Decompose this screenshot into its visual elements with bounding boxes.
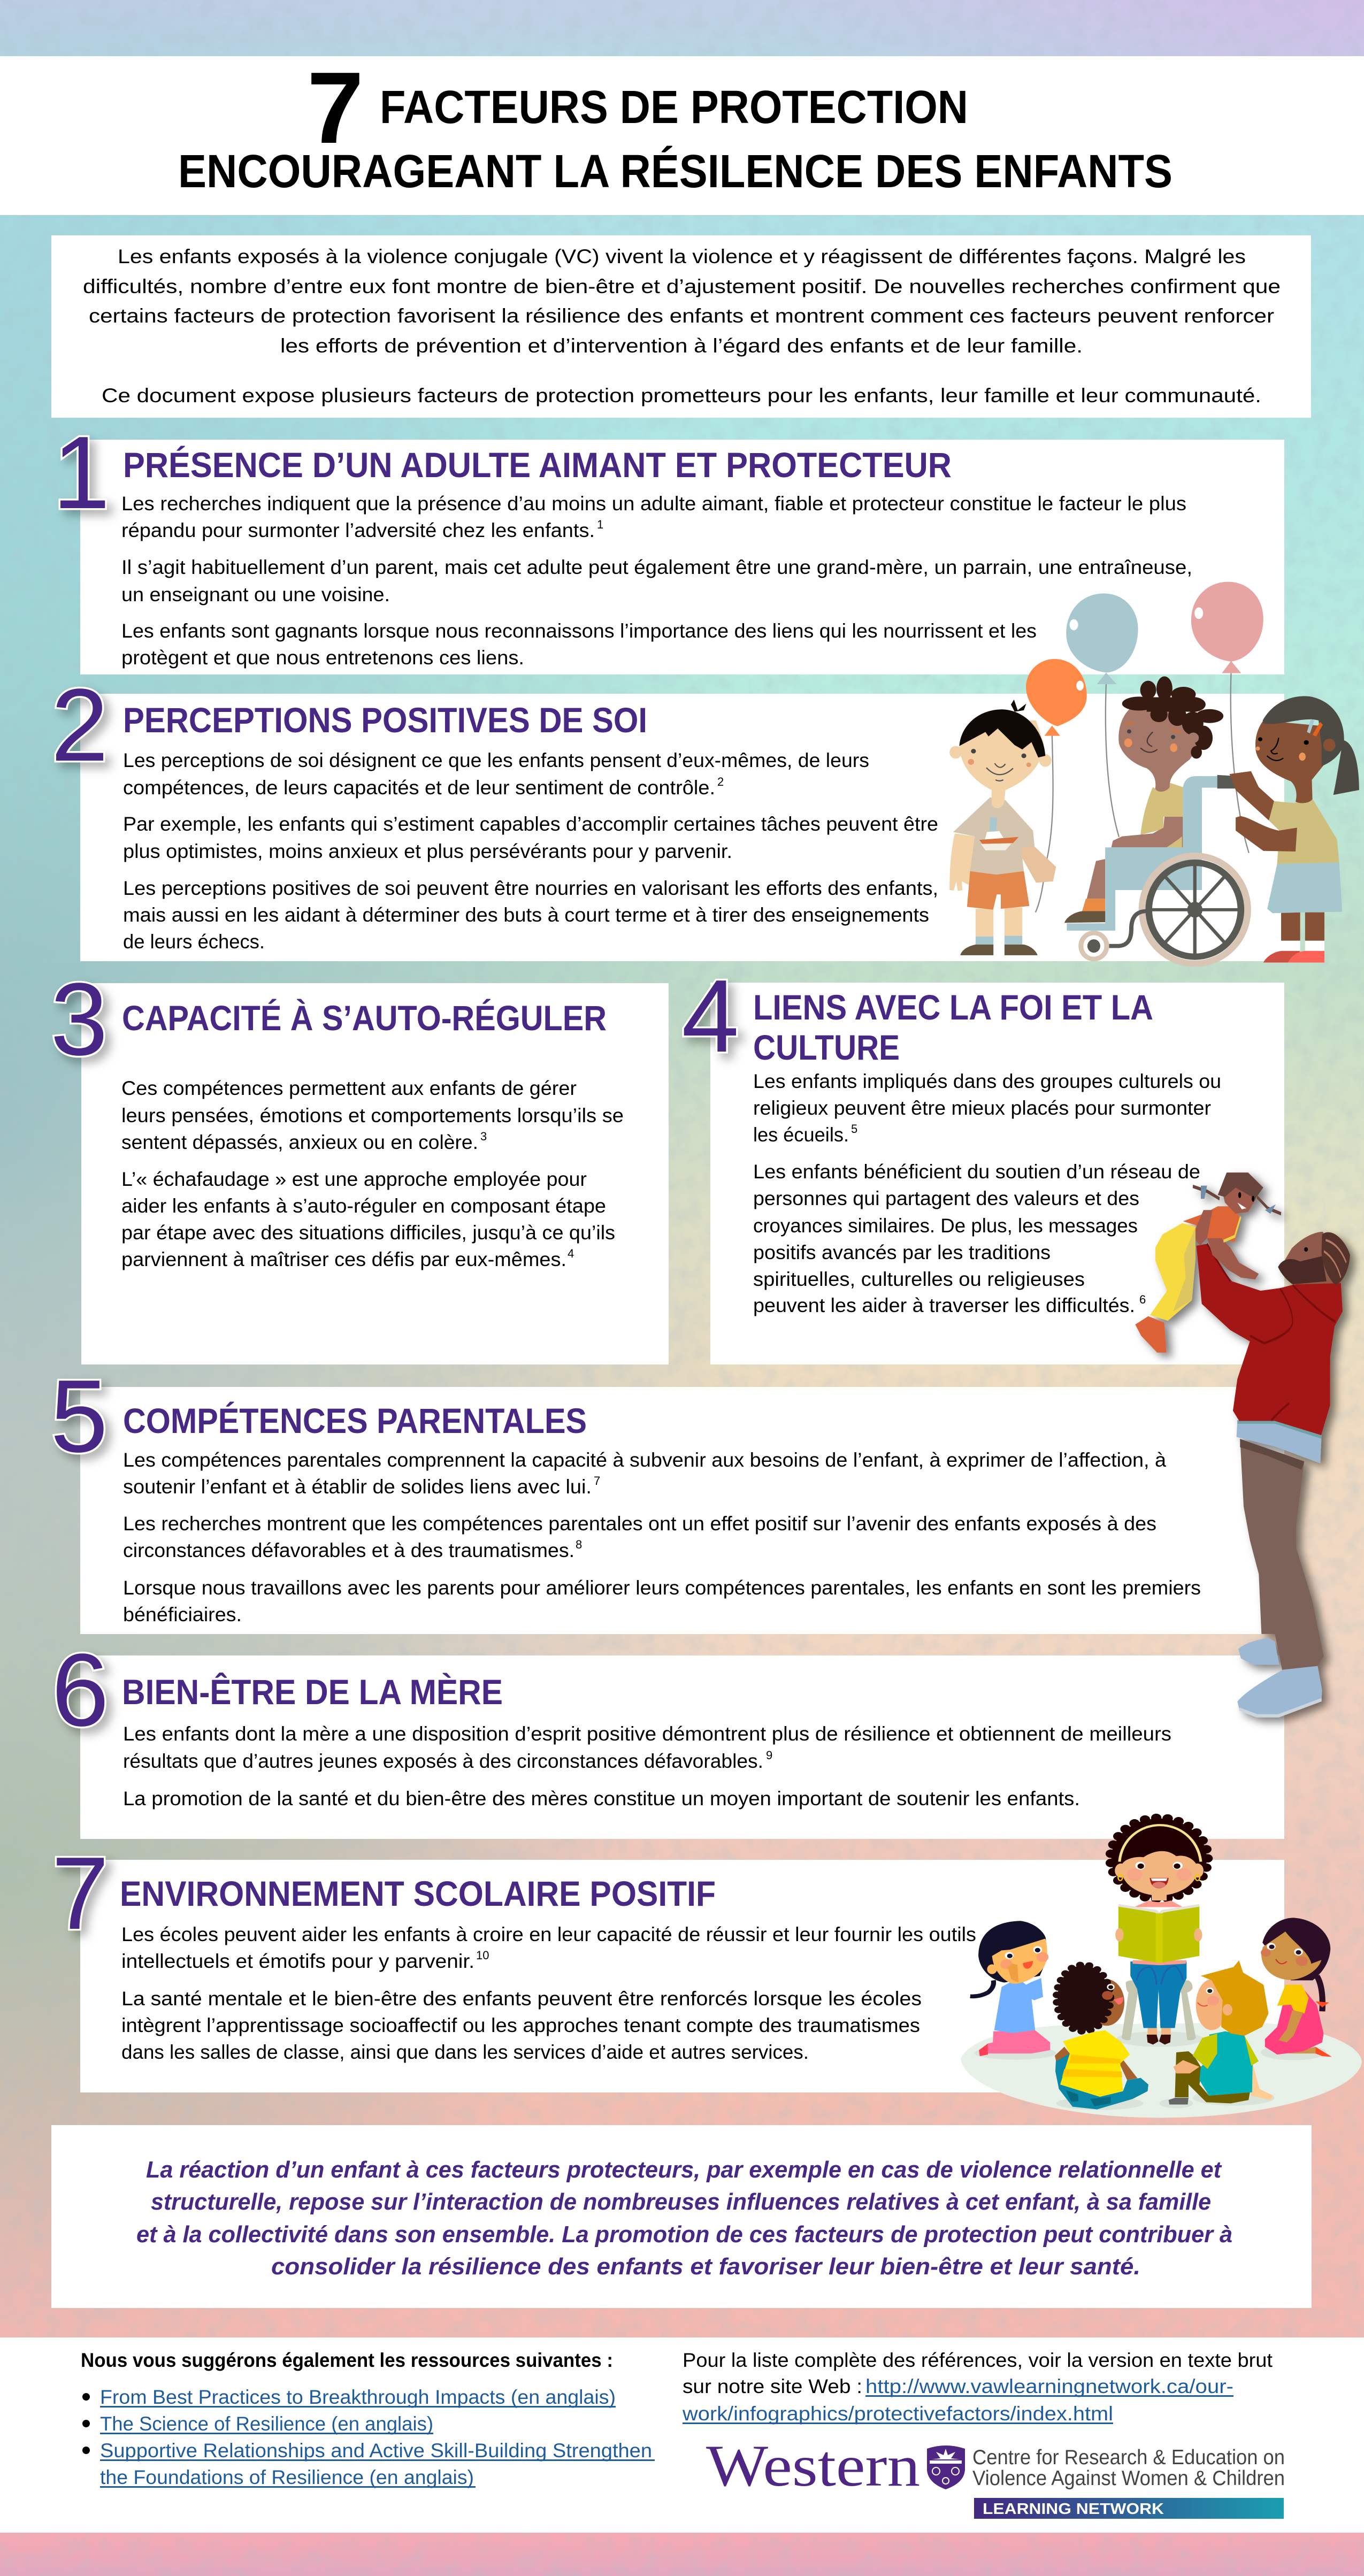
illustration: teacher reading to children — [961, 1818, 1362, 2118]
intro panel: les efforts de prévention et d’intervention à l’égard des enfants et de leur famille. — [280, 335, 1083, 357]
body 3 — [121, 1077, 624, 1270]
heading 4: LIENS AVEC LA FOI ET LA — [753, 987, 1153, 1027]
body 2: de leurs échecs. — [123, 931, 265, 953]
number 6: 6 — [51, 1632, 109, 1747]
body 7: intègrent l’apprentissage socioaffectif ou les approches tenant compte des traumatismes — [121, 2014, 920, 2036]
body 4: Les enfants impliqués dans des groupes culturels ou — [753, 1070, 1221, 1092]
body 5: Les recherches montrent que les compétences parentales ont un effet positif sur l’avenir des enfants exposés à des — [123, 1513, 1156, 1535]
body 5: soutenir l’enfant et à établir de solides liens avec lui. — [123, 1476, 592, 1498]
body 4: Les enfants bénéficient du soutien d’un réseau de — [753, 1161, 1200, 1183]
body 2: 2 — [717, 775, 724, 788]
references note — [682, 2349, 1273, 2425]
heading 6: BIEN-ÊTRE DE LA MÈRE — [122, 1672, 503, 1712]
body 5: 7 — [594, 1474, 600, 1488]
body 3: sentent dépassés, anxieux ou en colère. — [121, 1131, 478, 1153]
title number 7: 7 — [307, 51, 364, 165]
icon: Western shield — [927, 2445, 965, 2489]
panel 7: environnement scolaire — [51, 1835, 1284, 2092]
icon: blue balloon — [1066, 593, 1138, 684]
girl pushing wheelchair — [1230, 696, 1359, 962]
icon: balloon strings — [1036, 673, 1249, 913]
body 2: Les perceptions positives de soi peuvent être nourries en valorisant les efforts des enfants, — [123, 877, 938, 899]
references note: Pour la liste complète des références, voir la version en texte brut — [683, 2349, 1273, 2371]
body 1: 1 — [597, 518, 603, 531]
body 4: les écueils. — [753, 1124, 849, 1146]
body 7: dans les salles de classe, ainsi que dans les services d’aide et autres services. — [121, 2041, 809, 2063]
body 1: répandu pour surmonter l’adversité chez les enfants. — [121, 519, 595, 541]
child in yellow striped shirt — [1055, 1965, 1148, 2110]
body 5 — [123, 1449, 1201, 1626]
resources list: From Best Practices to Breakthrough Impacts (en anglais) — [100, 2386, 616, 2408]
father — [1197, 1232, 1350, 1716]
conclusion callout: La réaction d’un enfant à ces facteurs protecteurs, par exemple en cas de violence relationnelle et — [146, 2157, 1222, 2183]
heading 1: PRÉSENCE D’UN ADULTE AIMANT ET PROTECTEUR — [123, 445, 952, 485]
body 4: 5 — [851, 1122, 857, 1136]
number 2: 2 — [51, 667, 109, 783]
body 1: un enseignant ou une voisine. — [121, 584, 390, 605]
body 4: peuvent les aider à traverser les difficultés. — [753, 1294, 1135, 1316]
conclusion callout: consolider la résilience des enfants et favoriser leur bien-être et leur santé. — [271, 2253, 1140, 2280]
conclusion callout: et à la collectivité dans son ensemble. La promotion de ces facteurs de protection peut contribuer à — [136, 2221, 1232, 2248]
body 7: La santé mentale et le bien-être des enfants peuvent être renforcés lorsque les écoles — [121, 1988, 922, 2010]
body 3: aider les enfants à s’auto-réguler en composant étape — [121, 1195, 606, 1217]
title line 1: FACTEURS DE PROTECTION — [380, 81, 968, 133]
heading 5: COMPÉTENCES PARENTALES — [123, 1401, 587, 1440]
resources list: The Science of Resilience (en anglais) — [100, 2413, 433, 2435]
references note: sur notre site Web : — [683, 2375, 862, 2397]
body 4: 6 — [1139, 1293, 1146, 1306]
references note: work/infographics/protectivefactors/index.html — [682, 2403, 1113, 2425]
resources list: Nous vous suggérons également les ressources suivantes : — [81, 2349, 613, 2371]
intro panel: difficultés, nombre d’entre eux font montre de bien-être et d’ajustement positif. De nouvelles recherches confirment que — [83, 275, 1281, 297]
panel 4: foi et culture — [681, 958, 1284, 1364]
logo: Western Learning Network: Centre for Research & Education on — [972, 2446, 1285, 2469]
learning network bar — [974, 2498, 1284, 2519]
logo: Western Learning Network: Violence Against Women & Children — [972, 2467, 1285, 2490]
body 3: 3 — [480, 1130, 487, 1143]
icon: pink balloon — [1191, 582, 1263, 673]
body 2 — [123, 749, 938, 953]
body 4: spirituelles, culturelles ou religieuses — [753, 1268, 1085, 1290]
resources list: the Foundations of Resilience (en anglais) — [100, 2466, 474, 2488]
learning network bar: LEARNING NETWORK — [983, 2501, 1164, 2518]
intro panel: Ce document expose plusieurs facteurs de protection prometteurs pour les enfants, leur famille et leur communauté. — [102, 385, 1261, 407]
body 4 — [753, 1070, 1221, 1316]
panel 3: auto-régulation — [50, 961, 669, 1364]
body 5: Lorsque nous travaillons avec les parents pour améliorer leurs compétences parentales, les enfants en sont les premiers — [123, 1577, 1201, 1599]
references note: http://www.vawlearningnetwork.ca/our- — [865, 2375, 1233, 2397]
conclusion callout — [51, 2125, 1312, 2308]
floor shadows — [974, 2031, 1327, 2110]
logo: Western Learning Network — [706, 2433, 1285, 2519]
body 6: Les enfants dont la mère a une disposition d’esprit positive démontrent plus de résilience et obtiennent de meilleurs — [123, 1723, 1171, 1745]
intro panel: certains facteurs de protection favorisent la résilience des enfants et montrent comment ces facteurs peuvent renforcer — [89, 305, 1274, 327]
panel 6: bien-être de la mère — [51, 1632, 1284, 1839]
panel 5: compétences parentales — [50, 1358, 1284, 1634]
number 7: 7 — [51, 1835, 109, 1951]
body 6: résultats que d’autres jeunes exposés à des circonstances défavorables. — [123, 1750, 763, 1772]
body 5: bénéficiaires. — [123, 1604, 242, 1626]
body 7: Les écoles peuvent aider les enfants à croire en leur capacité de réussir et leur fournir les outils — [121, 1923, 976, 1945]
body 7: 10 — [476, 1949, 489, 1962]
body 3: 4 — [568, 1247, 574, 1260]
body 4: personnes qui partagent des valeurs et des — [753, 1187, 1139, 1209]
child in blue shirt — [970, 1921, 1050, 2056]
intro panel — [51, 235, 1311, 418]
illustration: three children with balloons — [949, 582, 1359, 964]
boy with ship shirt — [949, 700, 1056, 955]
icon: orange balloon — [1026, 659, 1087, 736]
body 3: Ces compétences permettent aux enfants de gérer — [121, 1077, 577, 1099]
panel 2: perceptions positives — [51, 667, 1284, 961]
heading 7: ENVIRONNEMENT SCOLAIRE POSITIF — [120, 1874, 716, 1913]
body 4: croyances similaires. De plus, les messages — [753, 1215, 1138, 1237]
body 3: leurs pensées, émotions et comportements lorsqu’ils se — [121, 1105, 624, 1126]
conclusion callout: structurelle, repose sur l’interaction de nombreuses influences relatives à cet enfant, à sa famille — [151, 2189, 1211, 2215]
body 1: Les recherches indiquent que la présence d’au moins un adulte aimant, fiable et protecteur constitue le facteur le plus — [121, 493, 1186, 515]
body 7: intellectuels et émotifs pour y parvenir. — [121, 1950, 474, 1972]
body 5: circonstances défavorables et à des traumatismes. — [123, 1539, 574, 1561]
body 2: mais aussi en les aidant à déterminer des buts à court terme et à tirer des enseignements — [123, 904, 929, 926]
title band — [0, 51, 1364, 215]
teacher — [1110, 1818, 1208, 2045]
body 4: positifs avancés par les traditions — [753, 1241, 1051, 1263]
number 1: 1 — [52, 415, 110, 530]
body 6: 9 — [766, 1749, 772, 1762]
resources list — [81, 2349, 655, 2488]
body 2: Les perceptions de soi désignent ce que les enfants pensent d’eux-mêmes, de leurs — [123, 749, 869, 771]
logo: Western Learning Network: Western — [706, 2433, 920, 2498]
title line 2: ENCOURAGEANT LA RÉSILENCE DES ENFANTS — [178, 145, 1173, 197]
child with pink dress — [1261, 1918, 1332, 2057]
rug — [961, 2022, 1362, 2118]
intro panel: Les enfants exposés à la violence conjugale (VC) vivent la violence et y réagissent de différentes façons. Malgré les — [118, 246, 1246, 267]
body 3: parviennent à maîtriser ces défis par eux-mêmes. — [121, 1248, 566, 1270]
body 2: compétences, de leurs capacités et de leur sentiment de contrôle. — [123, 777, 715, 799]
body 1 — [121, 493, 1192, 669]
body 3: par étape avec des situations difficiles, jusqu’à ce qu’ils — [121, 1222, 615, 1244]
body 5: Les compétences parentales comprennent la capacité à subvenir aux besoins de l’enfant, à exprimer de l’affection, à — [123, 1449, 1166, 1471]
body 2: Par exemple, les enfants qui s’estiment capables d’accomplir certaines tâches peuvent être — [123, 813, 938, 835]
heading 4 — [753, 987, 1153, 1067]
resources list: Supportive Relationships and Active Skill-Building Strengthen — [100, 2440, 652, 2462]
body 1: Les enfants sont gagnants lorsque nous reconnaissons l’importance des liens qui les nourrissent et les — [121, 620, 1037, 642]
body 4: religieux peuvent être mieux placés pour surmonter — [753, 1097, 1211, 1119]
body 7 — [121, 1923, 976, 2063]
number 5: 5 — [50, 1358, 108, 1474]
child in wheelchair — [1064, 676, 1251, 964]
body 5: 8 — [576, 1538, 582, 1551]
body 6: La promotion de la santé et du bien-être des mères constitue un moyen important de soutenir les enfants. — [123, 1788, 1080, 1810]
child with blond hair — [1169, 1960, 1273, 2104]
heading 4: CULTURE — [753, 1028, 900, 1067]
body 1: protègent et que nous entretenons ces liens. — [121, 647, 524, 669]
panel 1: adulte aimant — [52, 415, 1284, 674]
illustration: father lifting daughter — [1135, 1172, 1350, 1716]
heading 2: PERCEPTIONS POSITIVES DE SOI — [123, 700, 647, 740]
number 3: 3 — [50, 961, 108, 1077]
body 6 — [123, 1723, 1171, 1810]
body 3: L’« échafaudage » est une approche employée pour — [121, 1168, 587, 1190]
footer band — [0, 2337, 1364, 2533]
daughter — [1135, 1172, 1281, 1353]
heading 3: CAPACITÉ À S’AUTO-RÉGULER — [122, 998, 607, 1038]
body 1: Il s’agit habituellement d’un parent, mais cet adulte peut également être une grand-mère, un parrain, une entraîneuse, — [121, 556, 1192, 578]
body 2: plus optimistes, moins anxieux et plus persévérants pour y parvenir. — [123, 840, 732, 862]
number 4: 4 — [681, 958, 739, 1074]
